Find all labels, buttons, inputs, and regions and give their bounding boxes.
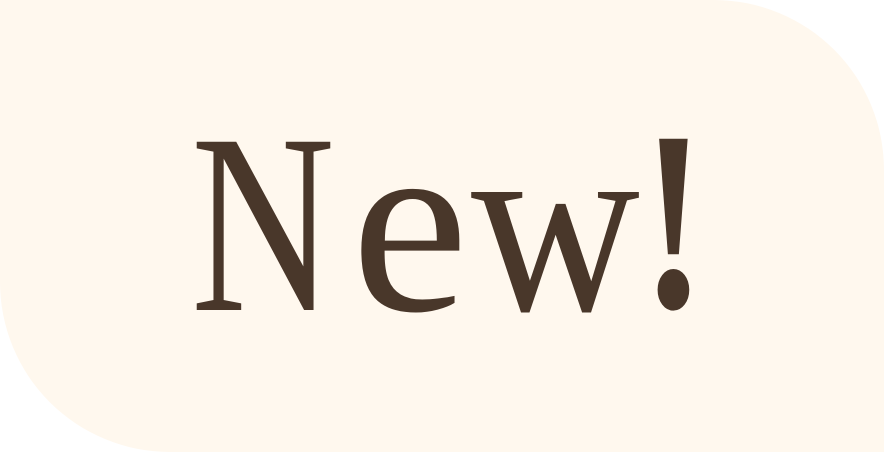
heading: New!: e: [351, 82, 468, 366]
heading: New!: w: [471, 82, 640, 366]
heading: New!: !: [641, 80, 706, 363]
heading: New!: N: [191, 81, 335, 366]
heading: New!: [191, 80, 706, 366]
